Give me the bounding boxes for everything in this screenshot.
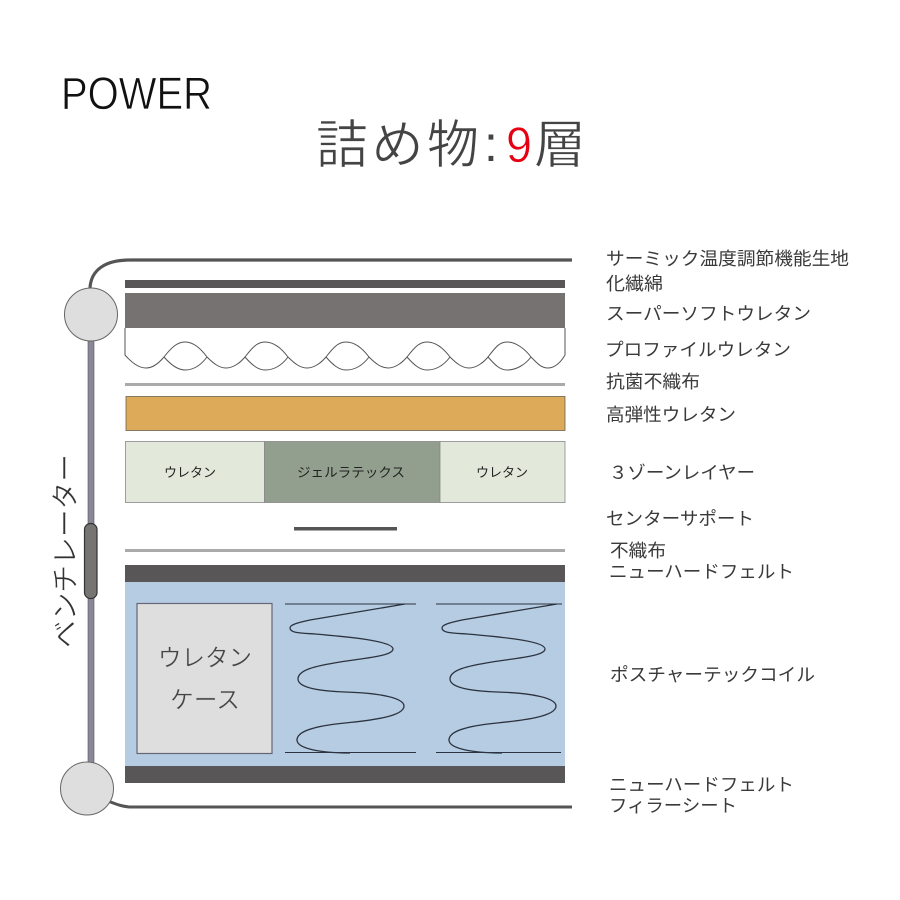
layer: high resilience urethane	[126, 396, 565, 430]
coil spring right	[436, 604, 562, 753]
zone: gel latex: ジェルラテックス	[297, 465, 405, 480]
zone: urethane left: ウレタン	[164, 465, 216, 480]
zone: urethane right: ウレタン	[476, 465, 528, 480]
title: filling 9 layers: 層	[534, 117, 586, 175]
label: profile urethane: プロファイルウレタン	[605, 340, 791, 360]
coil background	[125, 582, 565, 766]
zone: urethane right	[440, 442, 565, 502]
layer: thermic fibre	[125, 280, 565, 288]
layer: posture tech coil	[125, 582, 565, 766]
ventilator label: ベンチレーター	[50, 454, 81, 648]
title: filling 9 layers: :	[484, 116, 498, 172]
layer: center support	[294, 527, 397, 530]
ventilator handle	[84, 524, 97, 598]
zone: urethane left	[126, 442, 264, 502]
label: center support: センターサポート	[606, 509, 754, 529]
mattress outline bottom	[108, 801, 572, 807]
ventilator top circle	[64, 288, 118, 341]
layer: antibacterial non-woven	[125, 383, 565, 386]
ventilator tube	[88, 335, 94, 767]
layer: profile urethane	[125, 328, 565, 370]
layer: super soft urethane	[125, 293, 565, 328]
urethane case: ケース	[170, 687, 240, 714]
layer: new hard felt bottom	[125, 766, 565, 783]
title: filling 9 layers: 9	[506, 117, 532, 173]
title: filling 9 layers	[316, 116, 586, 175]
layer: new hard felt top	[125, 565, 565, 582]
ventilator bottom circle	[60, 762, 114, 815]
label: posture tech coil: ポスチャーテックコイル	[610, 665, 815, 685]
label: filler sheet: フィラーシート	[609, 796, 737, 816]
label: new hard felt bottom: ニューハードフェルト	[609, 775, 794, 795]
urethane case	[137, 604, 272, 754]
heading: POWER: POWER	[61, 68, 212, 119]
label: fibre wadding: 化繊綿	[606, 274, 663, 294]
label: high resilience urethane: 高弾性ウレタン	[606, 405, 736, 425]
label: antibacterial non-woven: 抗菌不織布	[606, 372, 700, 392]
layer: non-woven	[125, 549, 565, 552]
label: new hard felt top: ニューハードフェルト	[609, 562, 794, 582]
layer: 3 zone	[126, 442, 565, 502]
mattress outline top	[90, 260, 572, 288]
label: super soft urethane: スーパーソフトウレタン	[606, 304, 811, 324]
urethane case: ウレタン	[158, 645, 252, 672]
zone: gel latex	[264, 442, 440, 502]
label: non-woven: 不織布	[610, 541, 666, 561]
coil spring left	[285, 604, 416, 753]
title: filling 9 layers: 詰め物	[316, 117, 479, 175]
label: thermic fibre: サーミック温度調節機能生地	[606, 249, 849, 269]
label: 3 zone layer: ３ゾーンレイヤー	[609, 463, 755, 483]
